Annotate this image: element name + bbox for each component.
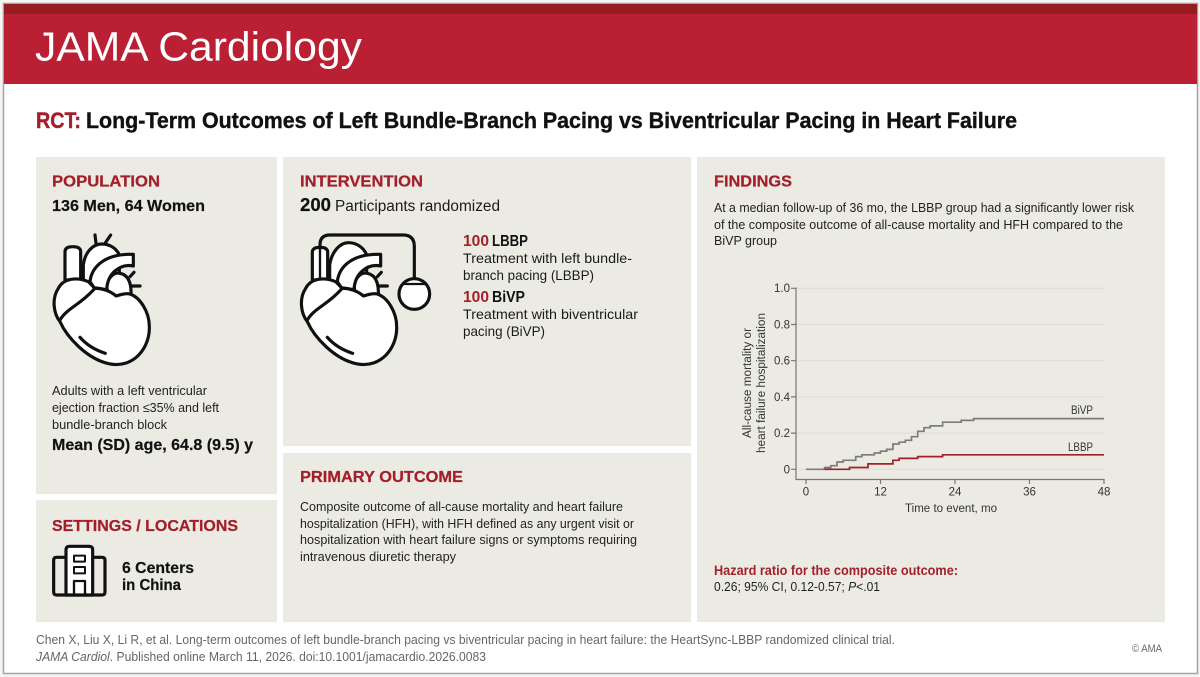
BiVP curve (806, 419, 1104, 469)
y axis tick labels: 0.4 (774, 392, 791, 404)
findings summary: At a median follow-up of 36 mo, the LBBP group had a significantly lower risk (714, 200, 1134, 215)
y axis tick labels: 0 (784, 464, 790, 476)
treatment arm: LBBP: 100 (463, 233, 489, 250)
journal name: JAMA Cardiology (35, 24, 363, 70)
findings heading: FINDINGS (714, 174, 792, 190)
primary outcome description: hospitalization (HFH), with HFH defined as any urgent visit or (300, 516, 635, 531)
treatment arm: BiVP: Treatment with biventricular (463, 306, 638, 322)
icon: heart with pacemaker (301, 235, 430, 365)
findings summary: of the composite outcome of all-cause mortality and HFH compared to the (714, 217, 1123, 232)
y axis title (742, 313, 768, 453)
population description (52, 383, 219, 432)
panel: population (36, 157, 277, 494)
hazard ratio: 0.26; 95% CI, 0.12-0.57; P<.01 (714, 579, 880, 594)
icon: heart (54, 235, 149, 365)
chart: cumulative incidence curves (742, 283, 1110, 515)
treatment arm: LBBP: LBBP (492, 233, 528, 250)
population description: ejection fraction ≤35% and left (52, 400, 219, 415)
x axis tick labels: 12 (874, 486, 887, 498)
population description: bundle-branch block (52, 417, 167, 432)
y axis tick labels (774, 283, 791, 476)
primary outcome heading: PRIMARY OUTCOME (300, 469, 463, 486)
x axis title: Time to event, mo (905, 503, 997, 515)
mean age: Mean (SD) age, 64.8 (9.5) y (52, 437, 253, 454)
participants randomized: Participants randomized (335, 198, 500, 215)
centers text: 6 Centers (122, 560, 194, 577)
y axis title: heart failure hospitalization (756, 313, 768, 453)
curve label: BiVP: BiVP (1071, 405, 1093, 417)
header banner (4, 4, 1197, 84)
y axis title: All-cause mortality or (742, 328, 754, 438)
title: RCT: (36, 108, 81, 133)
participants randomized: 200 (300, 195, 331, 215)
intervention heading: INTERVENTION (300, 174, 423, 190)
treatment arm: BiVP: 100 (463, 289, 489, 306)
x axis tick labels (803, 486, 1110, 498)
centers text (122, 560, 194, 594)
findings summary (714, 200, 1134, 248)
y axis tick labels: 0.6 (774, 356, 790, 368)
citation: Chen X, Liu X, Li R, et al. Long-term outcomes of left bundle-branch pacing vs biventricular pacing in heart failure: the HeartSync-LBBP randomized clinical trial. (36, 632, 895, 647)
treatment arm: BiVP (463, 289, 638, 339)
treatment arm: BiVP: BiVP (492, 289, 525, 306)
participants randomized (300, 195, 500, 215)
panel: primary outcome (283, 453, 691, 622)
citation (35, 632, 895, 664)
hazard ratio: Hazard ratio for the composite outcome: (714, 562, 958, 578)
treatment arm: LBBP: branch pacing (LBBP) (463, 267, 594, 283)
x axis tick labels: 24 (949, 486, 962, 498)
population heading: POPULATION (52, 174, 160, 190)
curve label: LBBP: LBBP (1068, 442, 1093, 454)
findings summary: BiVP group (714, 233, 777, 248)
primary outcome description: Composite outcome of all-cause mortality and heart failure (300, 499, 623, 514)
treatment arm: LBBP (463, 233, 632, 283)
LBBP curve (825, 455, 1104, 469)
population count: 136 Men, 64 Women (52, 198, 205, 215)
centers text: in China (122, 577, 181, 594)
y axis tick labels: 0.2 (774, 428, 790, 440)
treatment arm: LBBP: Treatment with left bundle- (463, 250, 632, 266)
panel: findings (697, 157, 1165, 622)
citation: JAMA Cardiol. Published online March 11, 2026. doi:10.1001/jamacardio.2026.0083 (35, 649, 486, 664)
population description: Adults with a left ventricular (52, 383, 208, 398)
settings heading: SETTINGS / LOCATIONS (52, 518, 238, 535)
x axis tick labels: 0 (803, 486, 809, 498)
icon: hospital building (54, 546, 105, 595)
y axis tick labels: 0.8 (774, 320, 790, 332)
primary outcome description: intravenous diuretic therapy (300, 549, 456, 564)
copyright: © AMA (1132, 643, 1163, 655)
panel: intervention (283, 157, 691, 446)
x axis tick labels: 48 (1098, 486, 1110, 498)
primary outcome description (300, 499, 637, 564)
panel: settings and locations (36, 500, 277, 622)
hazard ratio (714, 562, 958, 594)
x axis tick labels: 36 (1023, 486, 1036, 498)
y axis tick labels: 1.0 (774, 283, 790, 295)
primary outcome description: hospitalization with heart failure signs or symptoms requiring (300, 532, 637, 547)
treatment arm: BiVP: pacing (BiVP) (463, 323, 545, 339)
title: Long-Term Outcomes of Left Bundle-Branch Pacing vs Biventricular Pacing in Heart Failure (86, 108, 1017, 133)
